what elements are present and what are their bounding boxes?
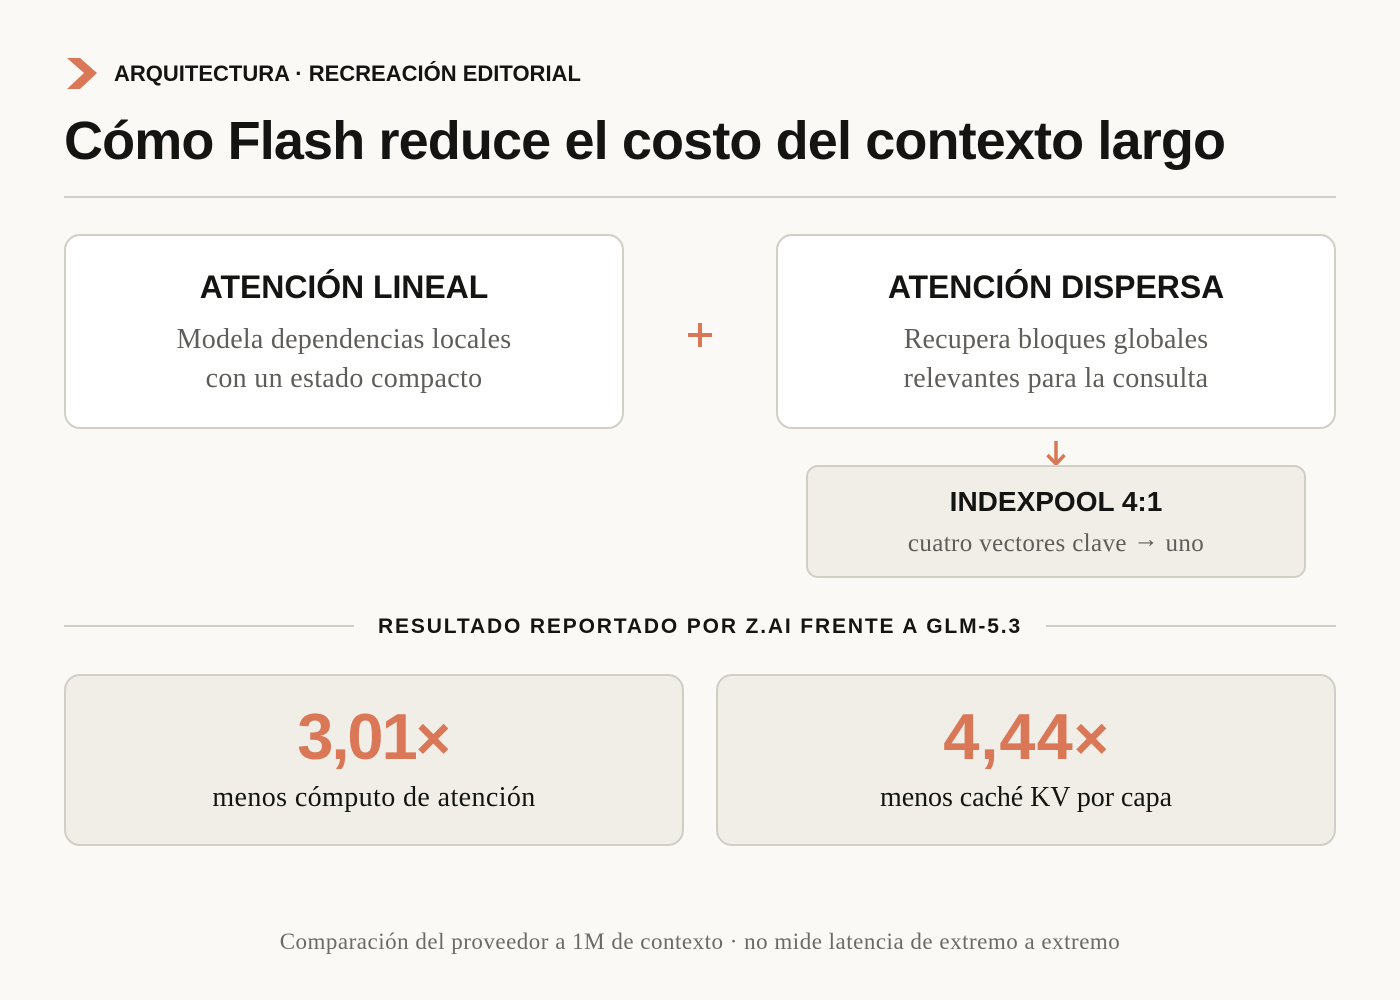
panel: IndexPool [806, 465, 1306, 578]
footnote: Comparación del proveedor a 1M de contexto · no mide latencia de extremo a extremo [280, 929, 1120, 954]
panel heading: atención lineal: ATENCIÓN LINEAL [200, 269, 488, 305]
arrow: down to IndexPool [1046, 441, 1066, 465]
stat label: menos cómputo de atención [212, 782, 536, 813]
eyebrow label: ARQUITECTURA · RECREACIÓN EDITORIAL [114, 61, 581, 86]
panel: atención lineal [64, 234, 624, 429]
header icon: chevron [67, 58, 97, 89]
stat value: 3,01× [297, 700, 451, 773]
IndexPool description: cuatro vectores clave → uno [908, 526, 1204, 557]
IndexPool heading: INDEXPOOL 4:1 [950, 486, 1162, 517]
panel: atención dispersa [776, 234, 1336, 429]
section heading: resultado: RESULTADO REPORTADO POR Z.AI FRENTE A GLM-5.3 [378, 615, 1022, 638]
panel description: atención lineal: con un estado compacto [206, 363, 482, 394]
panel description: atención dispersa [904, 324, 1208, 394]
panel: stat 3,01× [64, 674, 684, 846]
panel heading: atención dispersa: ATENCIÓN DISPERSA [888, 269, 1224, 305]
plus sign [688, 323, 712, 347]
panel description: atención lineal [177, 324, 511, 394]
panel description: atención lineal: Modela dependencias locales [177, 324, 511, 355]
stat label: menos caché KV por capa [880, 782, 1172, 813]
stat value: 4,44× [943, 700, 1109, 773]
title: Cómo Flash reduce el costo del contexto largo [64, 111, 1225, 171]
panel description: atención dispersa: Recupera bloques globales [904, 324, 1208, 355]
panel: stat 4,44× [716, 674, 1336, 846]
panel description: atención dispersa: relevantes para la consulta [904, 363, 1208, 394]
